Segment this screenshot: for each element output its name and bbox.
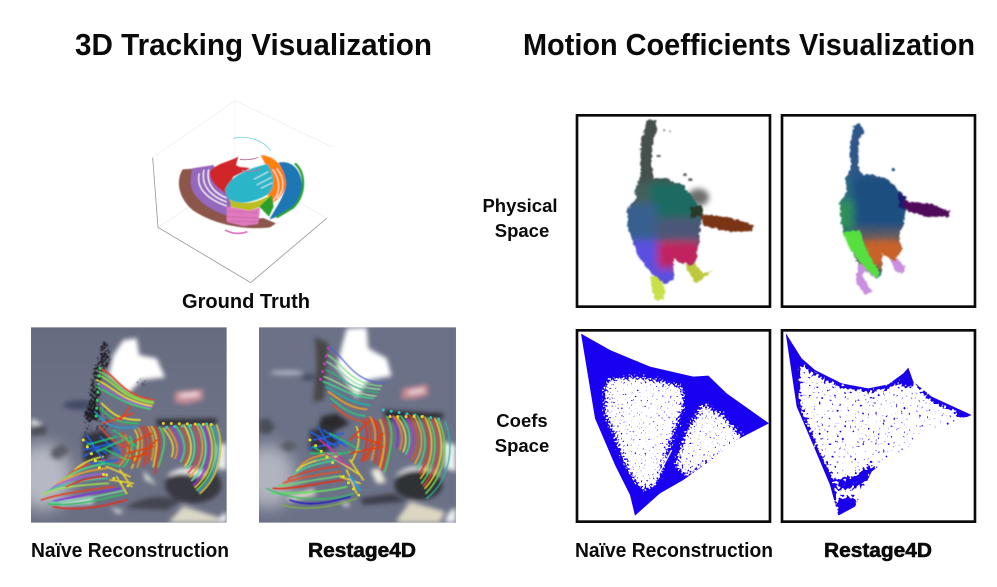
scene lighting and objects xyxy=(15,338,227,523)
panel: coefs space, Restage4D xyxy=(780,329,976,523)
pink leg fills xyxy=(852,260,908,297)
bright green leg xyxy=(843,230,880,278)
stray speck xyxy=(892,168,895,171)
cat body with blended colours xyxy=(625,118,703,285)
panel background xyxy=(782,330,975,522)
caption: Restage4D (left): Restage4D xyxy=(308,539,416,562)
body base colour xyxy=(627,120,702,284)
haze near shoulder xyxy=(688,189,709,206)
3D axes box xyxy=(153,101,332,283)
density-mapped dots xyxy=(786,333,972,516)
right tail purple xyxy=(903,201,950,217)
panel: physical space, Restage4D xyxy=(782,110,975,307)
shoulder dark navy xyxy=(898,193,907,208)
caption: Naive Reconstruction (right): Naïve Reconstruction xyxy=(575,540,773,562)
olive tracks xyxy=(229,195,271,211)
frame xyxy=(782,330,975,522)
cat body with blended colours xyxy=(838,122,908,296)
stray specks xyxy=(657,129,692,190)
dark shoulder patch xyxy=(690,205,703,218)
caption: Restage4D (right): Restage4D xyxy=(824,539,932,562)
body colour map xyxy=(838,123,906,274)
caption: Ground Truth: Ground Truth xyxy=(182,291,310,313)
image: Restage4D tracking xyxy=(259,327,456,523)
title: 3D Tracking Visualization: 3D Tracking Visualization xyxy=(75,27,432,62)
top cyan arc xyxy=(233,137,271,151)
row label: Physical Space: Physical xyxy=(482,195,558,216)
cat figure xyxy=(838,122,952,296)
cat figure xyxy=(620,110,753,300)
blue tracks xyxy=(269,162,302,219)
white gaps in orange xyxy=(273,168,283,201)
brown tracks xyxy=(179,169,276,228)
chart: ground truth 3D tracks xyxy=(153,101,332,283)
green stripe xyxy=(277,163,303,217)
panel: physical space, naive xyxy=(577,110,770,307)
panel background xyxy=(577,330,770,522)
track trajectories xyxy=(267,347,450,508)
caption: Naive Reconstruction (left): Naïve Reconstruction xyxy=(31,540,229,562)
scene background xyxy=(27,323,233,527)
frame xyxy=(577,115,770,307)
scene background xyxy=(255,323,462,527)
row label: Coefs Space: Coefs xyxy=(496,410,548,431)
white gaps in purple xyxy=(199,169,227,206)
scatter points xyxy=(581,334,769,516)
orange tracks xyxy=(261,155,286,205)
top pink arc xyxy=(240,157,261,171)
density-mapped dots xyxy=(581,334,769,516)
panel background xyxy=(782,115,975,307)
cyan tracks xyxy=(225,164,273,203)
white gaps in cyan xyxy=(254,172,273,188)
row label: Coefs Space: Space xyxy=(495,435,549,456)
track trajectories xyxy=(42,368,221,509)
purple tracks xyxy=(191,165,232,217)
green wedge xyxy=(259,195,274,217)
pink stripe gaps xyxy=(227,211,258,222)
small pink arc xyxy=(225,230,247,233)
track head points xyxy=(310,348,445,497)
frame xyxy=(577,330,770,522)
image: naive reconstruction tracking xyxy=(31,327,227,523)
title: Motion Coefficients Visualization: Motion Coefficients Visualization xyxy=(523,27,975,62)
frame xyxy=(782,115,975,307)
coloured tracks xyxy=(179,155,303,228)
body base colour xyxy=(839,122,907,295)
body colour map xyxy=(626,119,702,285)
red tracks xyxy=(210,157,250,193)
scene lighting and objects xyxy=(242,327,456,523)
panel: coefs space, naive xyxy=(576,329,772,523)
scatter points xyxy=(786,333,972,516)
streak in gap xyxy=(659,450,672,473)
row label: Physical Space: Space xyxy=(495,220,549,241)
olive leg left xyxy=(650,275,666,300)
reconstructed cat body, dark specks xyxy=(83,340,146,434)
panel background xyxy=(577,115,770,307)
track head points xyxy=(83,368,217,487)
pink tracks xyxy=(227,207,260,226)
olive leg right xyxy=(685,263,713,283)
brown right tail xyxy=(698,215,753,231)
